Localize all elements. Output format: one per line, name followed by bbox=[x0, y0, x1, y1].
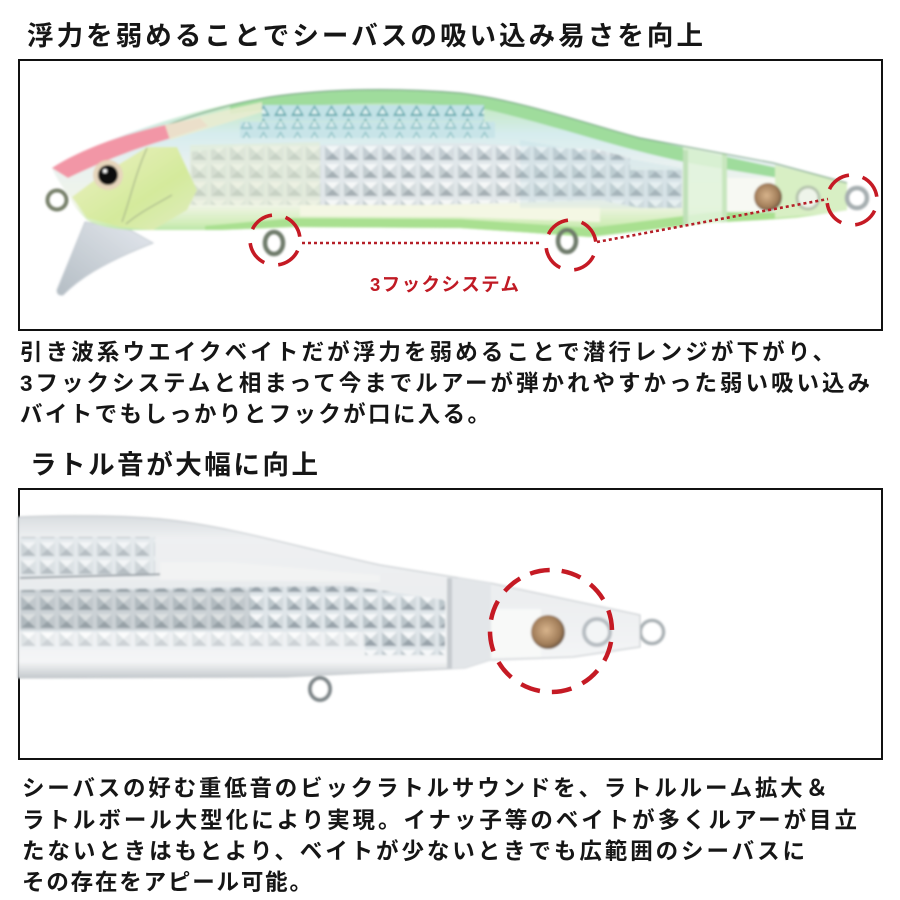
inner ring bbox=[584, 619, 610, 645]
top outline bbox=[160, 90, 847, 183]
title: buoyancy heading: 浮力を弱めることでシーバスの吸い込み易さを向上 bbox=[27, 21, 703, 51]
clear lure body bbox=[18, 516, 664, 700]
text block: first description: 引き波系ウエイクベイトだが浮力を弱めることで潜行レンジが下がり、 bbox=[20, 339, 835, 365]
hook eyes bbox=[265, 188, 867, 254]
lure lip bbox=[57, 222, 153, 295]
text block: second description: ラトルボール大型化により実現。イナッ子等のベイトが多くルアーが目立 bbox=[22, 807, 857, 833]
lure head pink bbox=[52, 118, 208, 178]
text block: second description bbox=[22, 776, 857, 895]
red dashed hook circles bbox=[242, 167, 885, 278]
text block: second description: シーバスの好む重低音のビックラトルサウンドを、ラトルルーム拡大＆ bbox=[22, 776, 828, 801]
lure body with scales bbox=[48, 88, 867, 295]
panel: three hook lure bbox=[19, 60, 885, 330]
lure head plate bbox=[72, 147, 197, 230]
lure tail ring bbox=[640, 620, 664, 644]
red dashed circle bbox=[473, 553, 629, 709]
text block: first description: バイトでもしっかりとフックが口に入る。 bbox=[20, 401, 490, 427]
hook eye bbox=[310, 678, 330, 700]
label: 3 hook system: 3フックシステム bbox=[370, 274, 519, 295]
rattle ball bbox=[531, 615, 565, 649]
text block: first description: 3フックシステムと相まって今までルアーが弾かれやすかった弱い吸い込み bbox=[20, 370, 870, 396]
rattle ball bbox=[754, 183, 782, 211]
text block: second description: たないときはもとより、ベイトが少ないときでも広範囲のシーバスに bbox=[22, 838, 805, 864]
text block: first description bbox=[20, 339, 870, 427]
dotted connection lines bbox=[302, 199, 828, 243]
lure eye bbox=[93, 160, 123, 190]
panel: rattle detail lure bbox=[18, 489, 882, 759]
heading: rattle sound: ラトル音が大幅に向上 bbox=[30, 450, 318, 480]
lure nose ring bbox=[48, 190, 66, 210]
inner ring bbox=[797, 187, 819, 209]
text block: second description: その存在をアピール可能。 bbox=[22, 870, 312, 895]
